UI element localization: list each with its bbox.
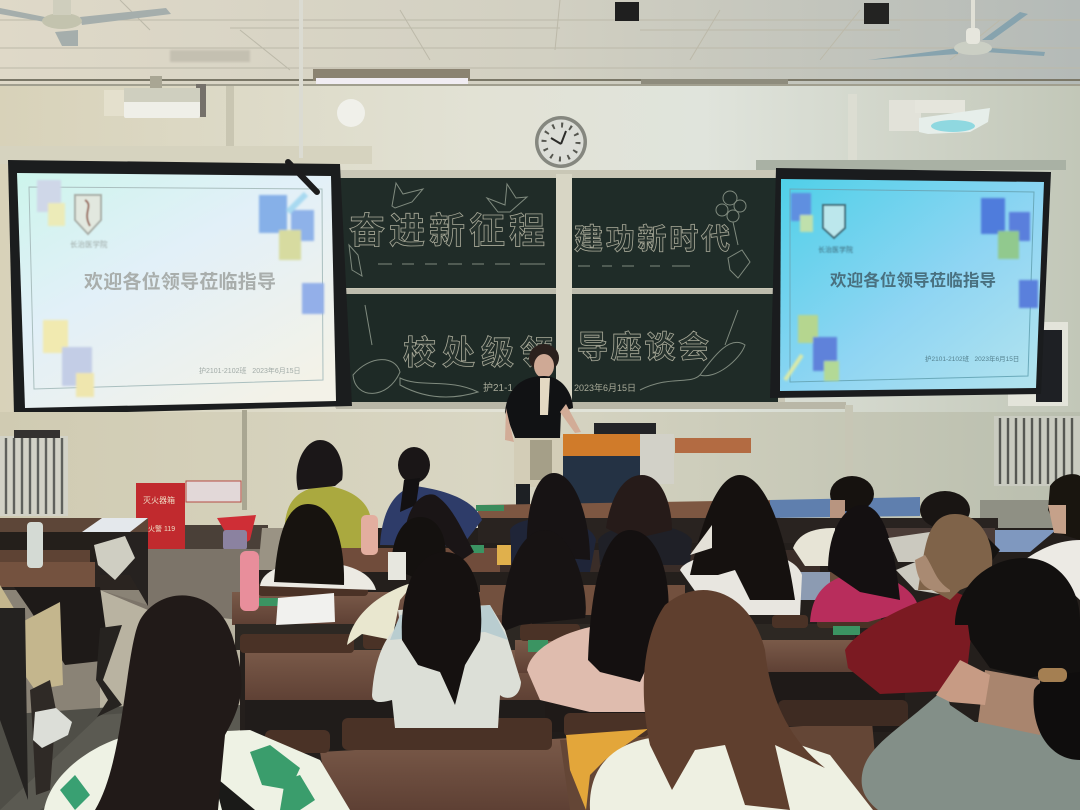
radiator left bbox=[0, 430, 68, 516]
student: cream top bbox=[347, 517, 446, 645]
blackboard heading 3: 校处级领 bbox=[403, 326, 553, 374]
seated person far left bbox=[0, 585, 63, 690]
yellow note bbox=[497, 545, 511, 565]
projector left bbox=[104, 76, 206, 118]
student: man behind right bbox=[888, 491, 1000, 595]
chalk drawings bbox=[349, 183, 750, 397]
student: man in white shirt bbox=[793, 476, 874, 566]
projector right bbox=[889, 100, 990, 134]
student: pink top centre-right bbox=[527, 530, 669, 712]
paper on desk bbox=[82, 518, 148, 532]
left slide footer: 护2101-2102班 2023年6月15日 bbox=[199, 366, 301, 375]
student: patterned top bbox=[380, 447, 482, 546]
blackboard heading 4: 导座谈会 bbox=[577, 322, 709, 367]
wall clock bbox=[535, 116, 587, 168]
ceiling fan right bbox=[868, 0, 1045, 60]
notebook bbox=[276, 593, 335, 625]
red trash bag bbox=[217, 515, 256, 550]
front desk row bbox=[320, 738, 575, 810]
left slide logo: 长治医学院 bbox=[70, 239, 108, 249]
second desk row bbox=[258, 528, 1056, 600]
student: white-grey top centre bbox=[372, 552, 521, 728]
radiator right bbox=[994, 416, 1080, 486]
microphone on screen bbox=[288, 162, 317, 192]
round wall sensor bbox=[337, 99, 365, 127]
student: centre dark hair bbox=[502, 530, 586, 632]
pink bottles bbox=[240, 515, 378, 611]
right slide decorations bbox=[785, 193, 1038, 381]
chairs bbox=[240, 583, 908, 753]
back wall bbox=[0, 84, 1080, 424]
student: patterned arm girl bbox=[405, 494, 474, 560]
baseboard bbox=[148, 525, 268, 549]
student: red top bbox=[845, 514, 992, 694]
projection screen right bbox=[770, 168, 1051, 398]
front desk right part bbox=[560, 722, 880, 810]
yellow folder bbox=[566, 729, 648, 810]
ceiling fan left bbox=[0, 0, 171, 46]
sneakers bbox=[33, 708, 72, 748]
student: white shirt second row bbox=[260, 504, 376, 590]
wall notice bbox=[186, 481, 241, 502]
fluorescent lights bbox=[313, 69, 788, 92]
green desk tags bbox=[258, 545, 860, 652]
blackboard date note: 2023年6月15日 bbox=[574, 382, 636, 393]
student: right man with glasses bbox=[1022, 474, 1080, 600]
blackboard heading 1: 奋进新征程 bbox=[349, 202, 545, 254]
student: front left long hair bbox=[44, 595, 350, 810]
water bottle bbox=[27, 522, 43, 568]
right slide logo bbox=[818, 205, 853, 254]
right slide logo: 长治医学院 bbox=[818, 245, 853, 254]
fire extinguisher box: 火警 119 bbox=[148, 524, 175, 533]
right slide footer: 护2101-2102班 2023年6月15日 bbox=[925, 354, 1019, 363]
chair frame far left bbox=[30, 680, 56, 795]
ceiling bbox=[0, 0, 1080, 92]
podium table bbox=[514, 423, 751, 508]
dark base under desks bbox=[232, 528, 1080, 810]
student: pink top bbox=[810, 505, 918, 622]
projection screen left bbox=[8, 160, 352, 415]
student: back row long hair bbox=[510, 473, 596, 572]
blackboard heading 2: 建功新时代 bbox=[574, 216, 730, 258]
ceiling cable pole bbox=[299, 0, 303, 158]
hanging cloth bag bbox=[94, 536, 135, 580]
third desk row bbox=[232, 585, 855, 650]
lower wall band bbox=[0, 412, 1080, 532]
student: front right ponytail bbox=[862, 558, 1080, 810]
right wall box bbox=[1008, 322, 1068, 406]
student: front centre brown hair bbox=[590, 590, 873, 810]
back desk row bbox=[476, 497, 998, 543]
left side desks bbox=[0, 518, 148, 800]
blackboard bbox=[335, 170, 846, 409]
student: back row centre bbox=[598, 475, 692, 565]
student: white top black hair bbox=[680, 475, 802, 615]
right slide title: 欢迎各位领导莅临指导 bbox=[830, 270, 996, 290]
left slide title: 欢迎各位领导莅临指导 bbox=[84, 270, 276, 293]
fire extinguisher box bbox=[136, 483, 185, 550]
fire extinguisher box: 灭火器箱 bbox=[143, 495, 175, 505]
blackboard class note: 护21-1 bbox=[483, 381, 513, 394]
student: yellow top bbox=[285, 440, 370, 548]
speaker bbox=[505, 344, 581, 442]
left slide decorations bbox=[37, 180, 324, 397]
ceiling cameras bbox=[615, 2, 889, 24]
left slide logo bbox=[70, 195, 108, 249]
floor bbox=[0, 549, 262, 810]
fourth desk row bbox=[245, 640, 905, 750]
